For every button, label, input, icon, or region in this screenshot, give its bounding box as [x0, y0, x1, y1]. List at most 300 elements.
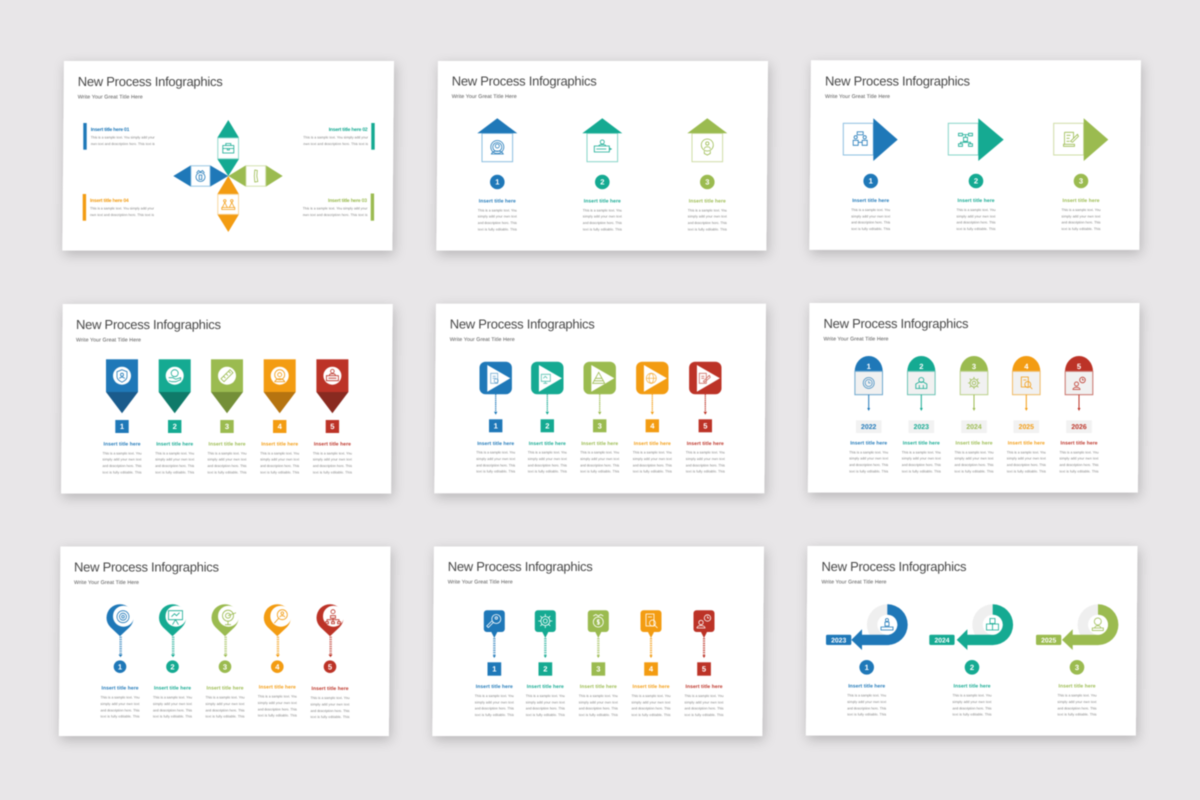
- body text: text is fully editable. This: [633, 470, 672, 474]
- body text: and description here. This: [688, 221, 727, 225]
- icon: presentation board: [168, 611, 182, 625]
- body text: This is a sample text. You: [1007, 450, 1046, 454]
- slide 8: speech tiles: [432, 546, 764, 736]
- heading: Insert title here: [476, 684, 513, 690]
- icon: person and clock: [1073, 377, 1085, 390]
- body text: simply add your own text: [208, 458, 247, 462]
- heading: Insert title here: [1060, 441, 1098, 447]
- title: New Process Infographics: [74, 560, 220, 574]
- arrow head: [118, 654, 122, 657]
- body text: text is fully editable. This: [258, 714, 297, 718]
- icon: pen: [254, 170, 258, 182]
- text block 01: own text and description here. This text is: [91, 142, 155, 146]
- house: [582, 118, 622, 162]
- pin: [316, 604, 344, 636]
- text block 03: This is a sample text. You simply add your: [303, 207, 368, 211]
- title: New Process Infographics: [822, 559, 967, 574]
- heading: Insert title here: [104, 441, 141, 447]
- body text: simply add your own text: [206, 702, 245, 706]
- tile: [694, 610, 714, 638]
- body text: [686, 451, 725, 474]
- body text: and description here. This: [633, 463, 672, 467]
- icon: document and pen: [699, 373, 710, 383]
- column 5: [313, 359, 352, 474]
- body text: text is fully editable. This: [102, 470, 142, 474]
- arrow stem: [1025, 395, 1027, 408]
- icon: diagonal ruler: [221, 370, 233, 382]
- body text: and description here. This: [1062, 221, 1101, 225]
- body text: simply add your own text: [313, 458, 352, 462]
- body text: [688, 208, 727, 231]
- dashed line: [225, 636, 226, 654]
- column 2: [948, 118, 1004, 231]
- body text: and description here. This: [526, 707, 565, 711]
- body text: simply add your own text: [1060, 457, 1099, 461]
- body text: text is fully editable. This: [206, 715, 245, 719]
- body text: text is fully editable. This: [526, 713, 565, 717]
- title: New Process Infographics: [450, 317, 595, 332]
- column 3: [580, 362, 619, 474]
- subtitle: Write Your Great Title Here: [76, 338, 141, 344]
- body text: This is a sample text. You: [632, 694, 671, 698]
- body text: and description here. This: [1058, 706, 1097, 710]
- body text: and description here. This: [849, 463, 888, 467]
- column 4: [1007, 356, 1046, 473]
- icon: person and clock: [697, 615, 711, 628]
- pennant: [211, 359, 243, 413]
- title: New Process Infographics: [824, 316, 969, 331]
- arrow head: [328, 654, 332, 657]
- body text: and description here. This: [528, 463, 567, 467]
- column 3: [579, 610, 618, 717]
- icon: podium: [881, 618, 893, 630]
- body text: and description here. This: [155, 464, 194, 468]
- icon: magnifier with person: [274, 610, 287, 623]
- slide 7: map pins: [59, 546, 391, 736]
- dashed arrow: [651, 394, 653, 412]
- arrow: green right: [228, 165, 283, 187]
- column 2: [582, 118, 622, 231]
- slide 4: pennants: [61, 304, 393, 494]
- arrow box: [843, 118, 898, 161]
- body text: [1060, 450, 1099, 473]
- icon: clock: [863, 378, 874, 388]
- number badge: 1: [492, 665, 497, 674]
- body text: This is a sample text. You: [528, 451, 567, 455]
- dashed line: [650, 638, 652, 656]
- icon: people: [916, 378, 927, 388]
- text block 02: This is a sample text. You simply add your: [303, 136, 369, 140]
- body text: [476, 451, 515, 474]
- icon: people: [222, 200, 235, 210]
- body text: simply add your own text: [952, 700, 992, 704]
- body text: This is a sample text. You: [258, 695, 297, 699]
- body text: text is fully editable. This: [580, 470, 619, 474]
- body text: text is fully editable. This: [310, 715, 350, 719]
- body text: text is fully editable. This: [1007, 469, 1046, 473]
- icon: shield: [117, 370, 127, 382]
- icon: person on stand: [1092, 618, 1103, 630]
- number badge: 2: [600, 178, 604, 187]
- icon: gear: [538, 614, 552, 628]
- body text: [478, 208, 517, 231]
- body text: text is fully editable. This: [1062, 227, 1101, 231]
- body text: [313, 451, 352, 474]
- number badge: 2: [173, 422, 177, 431]
- body text: simply add your own text: [851, 214, 890, 218]
- dashed line: [598, 638, 599, 656]
- body text: and description here. This: [686, 463, 725, 467]
- body text: text is fully editable. This: [260, 470, 299, 474]
- body text: simply add your own text: [155, 458, 194, 462]
- icon: magnifier person: [487, 614, 501, 628]
- arrow: orange down: [217, 176, 239, 232]
- slide 3: square arrows: [809, 60, 1141, 250]
- slide 6: timeline domes: [808, 303, 1140, 492]
- body text: simply add your own text: [632, 700, 671, 704]
- subtitle: Write Your Great Title Here: [448, 580, 513, 586]
- arrow box: [1054, 118, 1108, 161]
- column 4: [633, 362, 672, 474]
- body text: text is fully editable. This: [478, 227, 517, 231]
- body text: This is a sample text. You: [526, 694, 565, 698]
- column 4: [260, 359, 299, 474]
- pin: [264, 604, 291, 636]
- body text: This is a sample text. You: [952, 694, 992, 698]
- body text: text is fully editable. This: [902, 469, 941, 473]
- body text: text is fully editable. This: [956, 227, 996, 231]
- body text: text is fully editable. This: [153, 715, 192, 719]
- dashed line: [330, 636, 331, 654]
- arrow head: [598, 412, 601, 415]
- body text: text is fully editable. This: [849, 469, 888, 473]
- subtitle: Write Your Great Title Here: [78, 94, 143, 100]
- number badge: 1: [865, 663, 870, 672]
- title: New Process Infographics: [452, 74, 597, 89]
- body text: simply add your own text: [583, 215, 622, 219]
- dashed arrow: [704, 394, 706, 412]
- column 3: [1054, 118, 1108, 231]
- subtitle: Write Your Great Title Here: [74, 580, 139, 586]
- body text: and description here. This: [1007, 463, 1046, 467]
- dashed line: [277, 636, 279, 654]
- body text: and description here. This: [313, 464, 352, 468]
- column 2: [929, 604, 1013, 717]
- body text: This is a sample text. You: [313, 451, 352, 455]
- body text: [684, 694, 724, 717]
- arrow head: [650, 656, 652, 658]
- number badge: 5: [702, 665, 707, 674]
- pin: [212, 604, 239, 636]
- body text: [153, 696, 192, 719]
- icon: light bulb: [701, 139, 713, 155]
- body text: [851, 208, 890, 231]
- body text: [1007, 450, 1046, 473]
- arrow head: [546, 412, 549, 415]
- house: [477, 118, 517, 162]
- body text: text is fully editable. This: [632, 713, 671, 717]
- body text: text is fully editable. This: [954, 469, 994, 473]
- body text: simply add your own text: [100, 702, 140, 706]
- arrow head: [920, 408, 923, 411]
- heading: Insert title here: [1008, 441, 1045, 447]
- grey disc: [1078, 604, 1118, 645]
- heading: Insert title here: [852, 198, 889, 204]
- year label: 2024: [966, 424, 982, 431]
- body text: This is a sample text. You: [102, 451, 142, 455]
- icon: meeting: [853, 132, 867, 145]
- body text: This is a sample text. You: [155, 451, 194, 455]
- arrow head: [702, 656, 706, 658]
- column 2: [526, 610, 565, 717]
- body text: This is a sample text. You: [476, 451, 515, 455]
- white centre: [877, 615, 897, 635]
- text block 02: Insert title here 02: [329, 127, 368, 133]
- body text: and description here. This: [478, 221, 517, 225]
- body text: text is fully editable. This: [583, 227, 622, 231]
- icon: dollar badge: [593, 614, 603, 627]
- body text: simply add your own text: [579, 700, 618, 704]
- column 3: [687, 118, 727, 231]
- subtitle: Write Your Great Title Here: [450, 337, 515, 343]
- body text: and description here. This: [684, 707, 724, 711]
- text block 01: [91, 127, 156, 146]
- play tile: [531, 362, 564, 394]
- body text: simply add your own text: [528, 457, 567, 461]
- arrow head: [1078, 408, 1080, 411]
- text block 04: Insert title here 04: [90, 198, 129, 204]
- body text: This is a sample text. You: [579, 694, 618, 698]
- body text: simply add your own text: [260, 458, 299, 462]
- body text: [847, 694, 886, 717]
- body text: [310, 696, 350, 719]
- heading: Insert title here: [1058, 684, 1096, 690]
- body text: [155, 451, 194, 474]
- number badge: 3: [223, 662, 227, 671]
- arrow head: [597, 656, 600, 658]
- body text: and description here. This: [632, 707, 671, 711]
- icon: document search: [646, 614, 658, 628]
- body text: [206, 696, 245, 719]
- body text: This is a sample text. You: [686, 451, 725, 455]
- slide 9: U-turn arrows: [806, 546, 1138, 736]
- body text: This is a sample text. You: [956, 208, 996, 212]
- body text: and description here. This: [475, 707, 514, 711]
- body text: and description here. This: [952, 706, 992, 710]
- icon: gear: [968, 377, 980, 389]
- body text: [579, 694, 618, 717]
- body text: [475, 694, 514, 717]
- body text: text is fully editable. This: [208, 470, 247, 474]
- body text: and description here. This: [902, 463, 941, 467]
- body text: [102, 451, 142, 474]
- heading: Insert title here: [580, 684, 617, 690]
- number badge: 4: [649, 665, 654, 674]
- body text: text is fully editable. This: [579, 713, 618, 717]
- body text: [583, 208, 622, 231]
- icon: document search: [1021, 377, 1032, 389]
- arrow head: [171, 654, 175, 657]
- body text: [952, 694, 992, 717]
- text block 04: own text and description here. This text is: [90, 213, 154, 217]
- arrow head: [544, 656, 547, 658]
- icon: badge: [196, 170, 205, 182]
- body text: [526, 694, 565, 717]
- number badge: 5: [328, 662, 333, 671]
- heading: Insert title here: [529, 441, 566, 447]
- column 1: [475, 610, 514, 717]
- body text: This is a sample text. You: [902, 450, 941, 454]
- dome marker: 1: [867, 362, 872, 371]
- arrow stem: [973, 395, 975, 408]
- number badge: 3: [1079, 177, 1083, 186]
- body text: simply add your own text: [902, 457, 941, 461]
- body text: and description here. This: [208, 464, 247, 468]
- body text: simply add your own text: [478, 215, 517, 219]
- column 5: [310, 604, 350, 719]
- pennant: [106, 359, 138, 413]
- house: [687, 118, 727, 162]
- icon: target person: [491, 140, 504, 154]
- title: New Process Infographics: [76, 317, 222, 332]
- play tile: [636, 362, 668, 394]
- number badge: 3: [596, 665, 600, 674]
- year label: 2025: [1041, 637, 1056, 644]
- heading: Insert title here: [634, 441, 671, 447]
- body text: and description here. This: [260, 464, 299, 468]
- body text: This is a sample text. You: [580, 451, 619, 455]
- icon: org chart: [326, 610, 340, 624]
- year label: 2025: [1019, 424, 1034, 431]
- body text: This is a sample text. You: [206, 696, 245, 700]
- arrow head: [651, 412, 654, 415]
- column 2: [155, 359, 194, 474]
- arrow head: [972, 408, 976, 411]
- body text: and description here. This: [258, 707, 297, 711]
- number badge: 2: [970, 663, 974, 672]
- body text: This is a sample text. You: [851, 208, 890, 212]
- arrow head: [276, 654, 280, 657]
- subtitle: Write Your Great Title Here: [824, 336, 889, 342]
- white centre: [1088, 615, 1108, 635]
- body text: text is fully editable. This: [475, 713, 514, 717]
- arrow box: [948, 118, 1004, 161]
- arrow stem: [920, 395, 922, 408]
- icon: document: [491, 373, 498, 383]
- bar: blue 01: [83, 123, 87, 150]
- number badge: 4: [650, 422, 655, 431]
- subtitle: Write Your Great Title Here: [825, 94, 890, 100]
- arrow head: [704, 412, 707, 415]
- body text: simply add your own text: [102, 458, 142, 462]
- body text: simply add your own text: [688, 215, 727, 219]
- body text: [633, 451, 672, 474]
- dashed line: [703, 638, 705, 656]
- body text: simply add your own text: [686, 457, 725, 461]
- arrow head: [494, 412, 497, 415]
- play tile: [480, 362, 512, 394]
- dome marker: 3: [972, 362, 976, 371]
- number badge: 2: [170, 662, 175, 671]
- number badge: 3: [598, 422, 602, 431]
- arrow stem: [868, 395, 870, 408]
- text block 01: Insert title here 01: [91, 127, 130, 133]
- body text: and description here. This: [847, 706, 886, 710]
- number badge: 3: [1075, 663, 1079, 672]
- body text: simply add your own text: [1007, 457, 1046, 461]
- body text: simply add your own text: [475, 700, 514, 704]
- icon: briefcase: [223, 144, 234, 153]
- body text: text is fully editable. This: [686, 470, 725, 474]
- icon: person at desk: [326, 369, 338, 381]
- dashed line: [172, 636, 174, 654]
- body text: This is a sample text. You: [478, 208, 517, 212]
- heading: Insert title here: [958, 198, 995, 204]
- slide 1: four-way arrow cross: [62, 61, 394, 250]
- column 5: [686, 362, 725, 474]
- body text: [956, 208, 996, 231]
- subtitle: Write Your Great Title Here: [452, 94, 517, 100]
- icon: network: [958, 133, 972, 146]
- body text: This is a sample text. You: [583, 208, 622, 212]
- grey disc: [972, 604, 1013, 645]
- slide 2: houses: [436, 61, 768, 250]
- body text: [849, 450, 888, 473]
- body text: and description here. This: [310, 709, 350, 713]
- heading: Insert title here: [954, 684, 991, 690]
- dashed line: [120, 636, 121, 654]
- bar: green 03: [371, 194, 374, 221]
- number badge: 1: [869, 177, 874, 186]
- tile: [535, 610, 556, 638]
- number badge: 1: [118, 662, 123, 671]
- body text: text is fully editable. This: [528, 470, 567, 474]
- body text: and description here. This: [956, 221, 996, 225]
- column 1: [476, 362, 515, 474]
- heading: Insert title here: [102, 686, 139, 692]
- year label: 2023: [831, 637, 846, 644]
- body text: This is a sample text. You: [153, 696, 192, 700]
- body text: and description here. This: [1060, 463, 1099, 467]
- body text: simply add your own text: [310, 702, 350, 706]
- body text: This is a sample text. You: [100, 696, 140, 700]
- heading: Insert title here: [477, 441, 514, 447]
- column 1: [826, 604, 908, 717]
- text block 03: own text and description here. This text is: [303, 213, 368, 217]
- body text: This is a sample text. You: [1062, 208, 1101, 212]
- column 1: [100, 604, 140, 719]
- U-turn arrow: [957, 604, 1013, 650]
- heading: Insert title here: [689, 198, 726, 204]
- body text: and description here. This: [206, 708, 245, 712]
- dashed arrow: [599, 394, 601, 412]
- body text: [208, 451, 247, 474]
- bar: orange 04: [83, 194, 86, 221]
- heading: Insert title here: [527, 684, 564, 690]
- body text: and description here. This: [851, 221, 890, 225]
- body text: This is a sample text. You: [847, 694, 886, 698]
- pin: [106, 604, 134, 636]
- heading: Insert title here: [632, 684, 670, 690]
- tile: [484, 610, 505, 638]
- number badge: 4: [278, 422, 283, 431]
- body text: and description here. This: [476, 463, 515, 467]
- heading: Insert title here: [479, 198, 516, 204]
- play tile: [584, 362, 616, 394]
- body text: This is a sample text. You: [1058, 694, 1097, 698]
- body text: simply add your own text: [258, 701, 297, 705]
- body text: text is fully editable. This: [1058, 713, 1097, 717]
